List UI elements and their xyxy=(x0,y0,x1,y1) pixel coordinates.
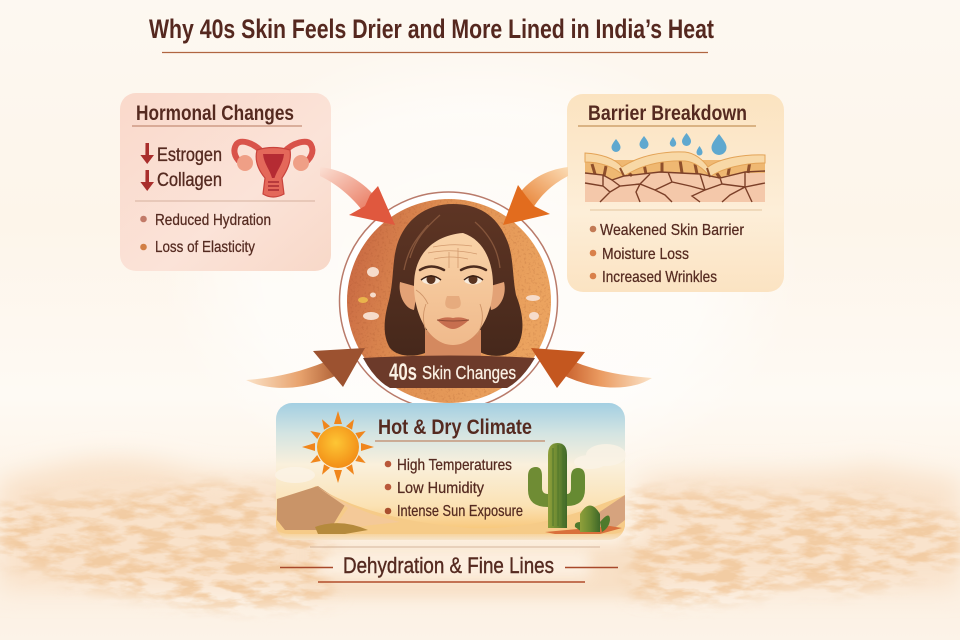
icon: sun xyxy=(302,411,374,483)
banner: 40s skin changes: 40s xyxy=(389,359,417,386)
panel: hot and dry climate xyxy=(275,403,626,540)
icon: large cactus xyxy=(528,443,585,528)
desert dunes xyxy=(276,486,625,534)
heading: hormonal changes: Hormonal Changes xyxy=(136,102,294,125)
label: collagen: Collagen xyxy=(157,170,222,191)
clouds xyxy=(275,444,626,483)
label: estrogen: Estrogen xyxy=(157,145,222,166)
arrow: hormonal changes to centre xyxy=(320,167,395,225)
icon: collagen down arrow xyxy=(140,170,154,191)
bullet list: barrier effects xyxy=(590,222,745,286)
arrow: climate to centre right xyxy=(531,348,652,388)
central portrait: 40s skin changes xyxy=(340,192,558,410)
icon: small cactus xyxy=(575,506,610,532)
bullet list: hormonal effects: Reduced Hydration xyxy=(155,212,271,229)
title: Why 40s Skin Feels Drier and More Lined in India’s Heat xyxy=(149,14,714,44)
bullet list: barrier effects: Increased Wrinkles xyxy=(602,269,717,286)
bullet list: barrier effects: Moisture Loss xyxy=(602,246,689,263)
bullet list: climate factors: Intense Sun Exposure xyxy=(397,503,523,520)
arrow: climate to centre left xyxy=(246,348,365,388)
panel: hormonal changes xyxy=(120,93,331,271)
icon: estrogen down arrow xyxy=(140,143,154,164)
banner: 40s skin changes xyxy=(363,356,535,388)
bullet list: hormonal effects: Loss of Elasticity xyxy=(155,239,255,256)
arrow: barrier breakdown to centre xyxy=(503,167,568,225)
heading: barrier breakdown: Barrier Breakdown xyxy=(588,102,747,125)
banner: 40s skin changes: Skin Changes xyxy=(422,363,516,383)
footer: dehydration and fine lines xyxy=(280,547,618,582)
icon: uterus xyxy=(234,142,312,197)
bullet list: hormonal effects xyxy=(140,212,271,256)
heading: hot and dry climate: Hot & Dry Climate xyxy=(378,416,532,439)
bullet list: climate factors: Low Humidity xyxy=(397,480,484,497)
bullet list: climate factors xyxy=(385,457,523,520)
flakes xyxy=(358,267,540,320)
illustration: cracked skin layers xyxy=(585,152,765,202)
portrait: woman's face xyxy=(385,204,522,357)
panel: barrier breakdown xyxy=(567,94,784,292)
bullet list: climate factors: High Temperatures xyxy=(397,457,512,474)
footer: dehydration and fine lines: Dehydration & Fine Lines xyxy=(343,553,554,578)
bullet list: barrier effects: Weakened Skin Barrier xyxy=(600,222,745,239)
icon: water drops xyxy=(612,133,726,156)
